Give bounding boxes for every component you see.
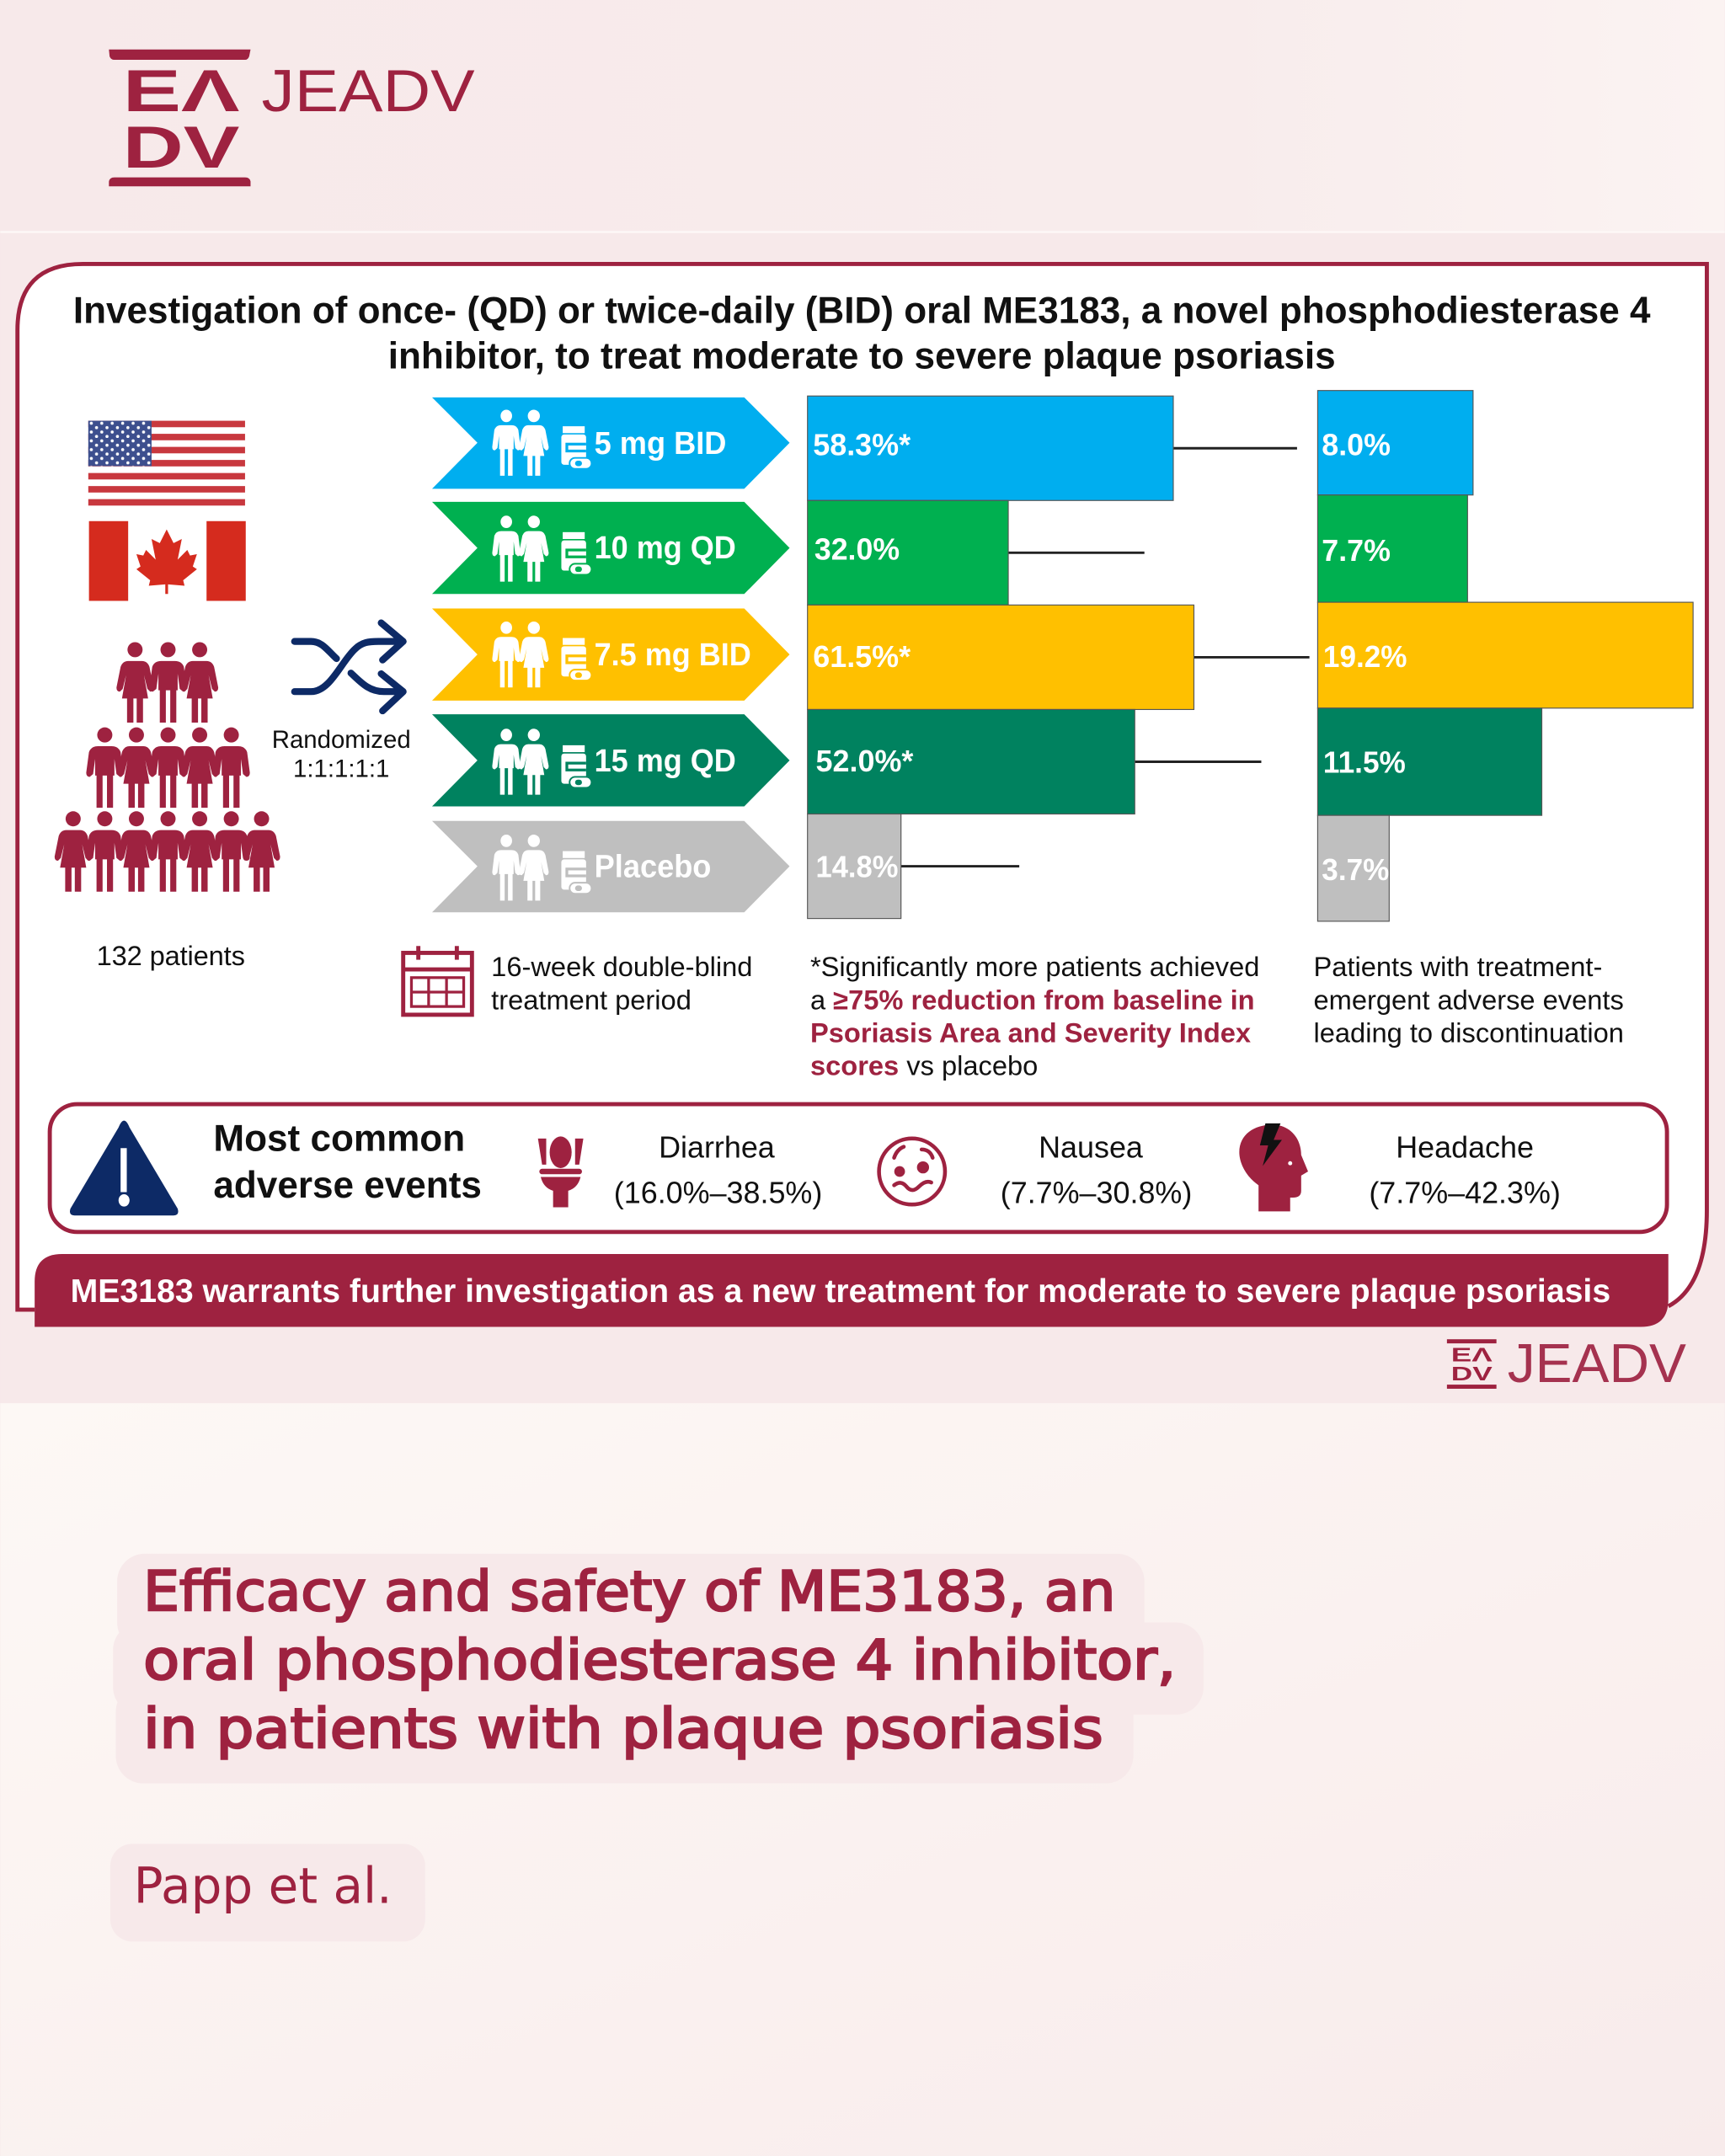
headache rate [1369, 1130, 1561, 1210]
icon: toilet [538, 1136, 584, 1207]
headache rate: Headache [1396, 1130, 1534, 1165]
nausea rate: (7.7%–30.8%) [1001, 1176, 1192, 1210]
adverse event discontinuation caption: Patients with treatment- [1314, 951, 1602, 982]
icon: randomization shuffle arrows [295, 623, 403, 711]
diarrhea rate: Diarrhea [659, 1130, 775, 1165]
arm: 5 mg BID [432, 398, 789, 488]
adverse event discontinuation caption: emergent adverse events [1314, 984, 1624, 1015]
PASI-75 footnote: Psoriasis Area and Severity Index [810, 1017, 1251, 1049]
arm: Placebo: Placebo [595, 849, 711, 885]
panel: main study summary [18, 264, 1706, 1327]
title [73, 291, 1651, 377]
logo: JEADV small: EΛ [1451, 1343, 1493, 1365]
conclusion banner: ME3183 warrants further investigation as a new treatment for moderate to severe plaque psoriasis [71, 1273, 1610, 1310]
bar chart: PASI-75 response: 14.8% [815, 850, 898, 884]
headache rate: (7.7%–42.3%) [1369, 1176, 1561, 1210]
arm: 10 mg QD: 10 mg QD [595, 530, 736, 566]
nausea rate [1001, 1130, 1192, 1210]
randomized label [272, 726, 411, 782]
icon: nausea face [879, 1139, 945, 1204]
arm: 7.5 mg BID [432, 608, 789, 701]
bar chart: discontinuation due to adverse events: 19.2% [1323, 639, 1407, 674]
adverse event discontinuation caption [1314, 951, 1624, 1049]
PASI-75 footnote: *Significantly more patients achieved [810, 951, 1259, 982]
PASI-75 footnote: a ≥75% reduction from baseline in [810, 984, 1255, 1015]
PASI-75 footnote [810, 951, 1259, 1081]
adverse events heading: Most common [213, 1118, 465, 1160]
PASI-75 footnote: scores vs placebo [810, 1050, 1038, 1081]
bar chart: discontinuation due to adverse events: 11.5% [1323, 745, 1406, 780]
article title with highlight [113, 1554, 1204, 1784]
bar chart: discontinuation due to adverse events: 3.7% [1322, 852, 1389, 887]
logo: JEADV header: DV [123, 114, 240, 180]
bar chart: PASI-75 response: 52.0%* [815, 744, 913, 778]
article title with highlight: oral phosphodiesterase 4 inhibitor, [143, 1628, 1176, 1692]
article authors: Papp et al. [134, 1857, 393, 1915]
title: inhibitor, to treat moderate to severe plaque psoriasis [388, 336, 1336, 377]
treatment period text: 16-week double-blind [491, 951, 752, 982]
arm: 15 mg QD [432, 714, 789, 807]
arm: 10 mg QD [432, 502, 789, 594]
bar chart: discontinuation due to adverse events [1317, 391, 1693, 921]
logo: JEADV small: DV [1451, 1363, 1493, 1385]
title: Investigation of once- (QD) or twice-daily (BID) oral ME3183, a novel phosphodiesterase 4 [73, 291, 1651, 332]
icon: warning triangle [70, 1121, 179, 1215]
article authors [110, 1844, 425, 1941]
article title with highlight: in patients with plaque psoriasis [143, 1697, 1103, 1761]
randomized label: 1:1:1:1:1 [293, 755, 389, 782]
randomized label: Randomized [272, 726, 411, 754]
arm: 15 mg QD: 15 mg QD [595, 743, 736, 779]
treatment period text: treatment period [491, 984, 692, 1015]
adverse events heading [213, 1118, 482, 1206]
article title with highlight: Efficacy and safety of ME3183, an [143, 1560, 1115, 1624]
arm: 7.5 mg BID: 7.5 mg BID [595, 637, 751, 673]
bar chart: PASI-75 response: 58.3%* [813, 427, 911, 462]
arm: Placebo [432, 821, 789, 912]
bar chart: discontinuation due to adverse events: 7.7% [1322, 533, 1391, 568]
logo: JEADV small: JEADV [1508, 1332, 1686, 1394]
panel: most common adverse events [50, 1104, 1667, 1232]
treatment period text [491, 951, 752, 1015]
conclusion banner [35, 1254, 1669, 1327]
patients count: 132 patients [97, 940, 245, 971]
logo: JEADV header [109, 50, 475, 186]
adverse events heading: adverse events [213, 1165, 482, 1206]
bar chart: PASI-75 response [808, 396, 1310, 919]
bar chart: discontinuation due to adverse events: 8.0% [1322, 427, 1391, 462]
icon: US flag [88, 421, 245, 505]
icon: headache [1239, 1123, 1308, 1211]
diarrhea rate [614, 1130, 822, 1210]
icon: calendar [403, 946, 472, 1015]
diarrhea rate: (16.0%–38.5%) [614, 1176, 822, 1210]
adverse event discontinuation caption: leading to discontinuation [1314, 1017, 1624, 1049]
arm: 5 mg BID: 5 mg BID [595, 425, 726, 462]
nausea rate: Nausea [1039, 1130, 1143, 1165]
logo: JEADV header: EΛ [123, 57, 240, 124]
icon: patient pyramid [55, 642, 280, 892]
icon: Canadian flag [89, 521, 246, 600]
logo: JEADV header: JEADV [262, 57, 475, 124]
bar chart: PASI-75 response: 61.5%* [813, 639, 911, 674]
bar chart: PASI-75 response: 32.0% [814, 531, 900, 566]
